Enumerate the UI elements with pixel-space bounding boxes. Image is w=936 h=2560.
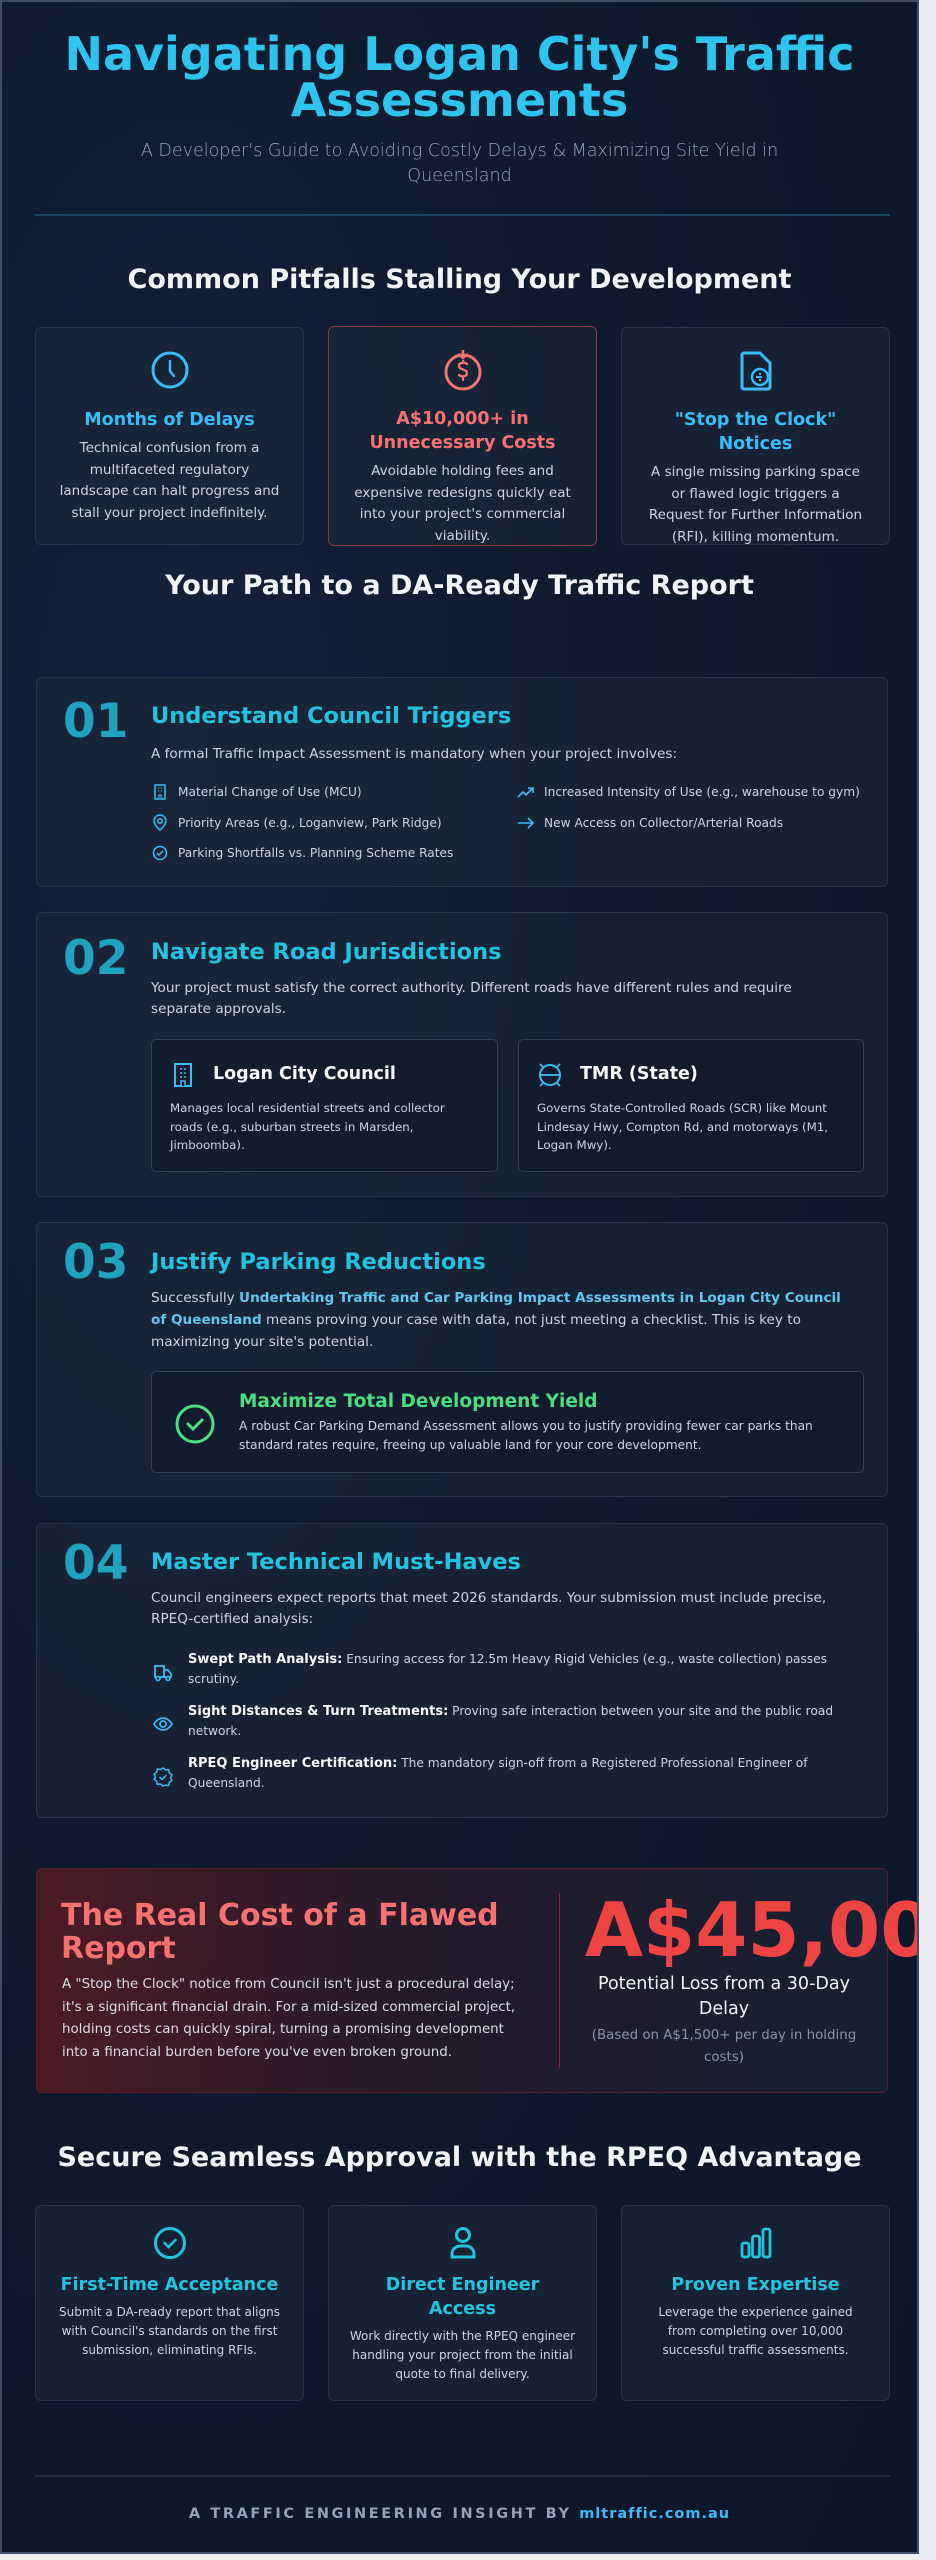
panel: step 01: A formal Traffic Impact Assessment is mandatory when your project involves: — [151, 746, 677, 762]
list: triggers: New Access on Collector/Arterial Roads — [544, 816, 783, 830]
icon: clock — [152, 352, 188, 388]
list: technical items: Sight Distances & Turn Treatments: Proving safe interaction between your site and the public road network. — [188, 1704, 833, 1738]
panel: step 04: Master Technical Must-Haves — [151, 1549, 521, 1575]
panel: step 04 — [36, 1523, 888, 1818]
subtitle: A Developer's Guide to Avoiding Costly Delays & Maximizing Site Yield in Queensland — [141, 141, 778, 186]
panel: first-time acceptance: First-Time Acceptance — [61, 2275, 278, 2295]
panel: real cost: A "Stop the Clock" notice from Council isn't just a procedural delay; it's a significant financial drain. For a mid-sized commercial project, holding costs can quickly spiral, turning a promising development into a financial burden before you've even broken ground. — [62, 1977, 515, 2060]
footer: A TRAFFIC ENGINEERING INSIGHT BY mltraffic.com.au — [189, 2506, 730, 2522]
callout: maximize yield: Maximize Total Development Yield — [239, 1391, 597, 1412]
panel: proven expertise: Leverage the experience gained from completing over 10,000 successful traffic assessments. — [658, 2305, 853, 2357]
panel: engineer access: Access — [429, 2299, 496, 2319]
panel: costs: Avoidable holding fees and expensive redesigns quickly eat into your project's commercial viability. — [354, 463, 571, 544]
panel: proven expertise — [621, 2205, 890, 2401]
panel: months of delays: Months of Delays — [84, 410, 255, 430]
panel: step 04: Council engineers expect reports that meet 2026 standards. Your submission must include precise, RPEQ-certified analysis: — [151, 1590, 826, 1627]
panel: costs: A$10,000+ in — [396, 409, 529, 429]
panel: step 01 — [36, 677, 888, 887]
panel: costs: Unnecessary Costs — [369, 433, 556, 453]
panel: real cost — [36, 1868, 888, 2093]
heading: secure approval: Secure Seamless Approval with the RPEQ Advantage — [57, 2142, 862, 2173]
panel: engineer access — [328, 2205, 597, 2401]
panel: months of delays: Technical confusion from a multifaceted regulatory landscape can halt progress and stall your project indefinitely. — [60, 440, 279, 520]
icon: money bag — [444, 350, 482, 390]
list: triggers: Increased Intensity of Use (e.g., warehouse to gym) — [544, 785, 860, 799]
panel: costs — [328, 326, 597, 546]
heading: common pitfalls: Common Pitfalls Stalling Your Development — [128, 264, 791, 295]
callout: maximize yield: A robust Car Parking Demand Assessment allows you to justify providing fewer car parks than standard rates require, freeing up valuable land for your core development. — [239, 1419, 813, 1452]
panel: step 03: Successfully Undertaking Traffic and Car Parking Impact Assessments in Logan City Council of Queensland means proving your case with data, not just meeting a checklist. This is key to maximizing your site's potential. — [151, 1290, 841, 1350]
title: Navigating Logan City's Traffic — [65, 27, 854, 81]
list: triggers: Parking Shortfalls vs. Planning Scheme Rates — [178, 846, 453, 860]
panel: step 03: 03 — [63, 1235, 128, 1290]
panel: step 02: 02 — [63, 931, 128, 986]
heading: path: Your Path to a DA-Ready Traffic Report — [165, 570, 754, 601]
panel: step 04: 04 — [63, 1536, 128, 1591]
panel: engineer access: Direct Engineer — [386, 2275, 539, 2295]
panel: step 01: 01 — [63, 694, 128, 749]
list: triggers — [152, 784, 860, 860]
panel: proven expertise: Proven Expertise — [671, 2275, 840, 2295]
sub-panel: council: Logan City Council — [213, 1064, 396, 1084]
sub-panel: council: Manages local residential streets and collector roads (e.g., suburban streets in Marsden, Jimboomba). — [170, 1101, 445, 1152]
panel: stop the clock: "Stop the Clock" — [675, 410, 836, 430]
panel: step 02 — [36, 912, 888, 1197]
icon: document — [740, 352, 772, 390]
list: technical items: RPEQ Engineer Certification: The mandatory sign-off from a Registered Professional Engineer of Queensland. — [188, 1756, 808, 1790]
sub-panel: TMR: Governs State-Controlled Roads (SCR) like Mount Lindesay Hwy, Compton Rd, and motorways (M1, Logan Mwy). — [537, 1101, 828, 1152]
panel: real cost: The Real Cost of a Flawed Report — [61, 1898, 499, 1966]
panel: first-time acceptance — [35, 2205, 304, 2401]
panel: step 03: Justify Parking Reductions — [151, 1249, 486, 1275]
list: technical items: Swept Path Analysis: Ensuring access for 12.5m Heavy Rigid Vehicles (e.g., waste collection) passes scrutiny. — [188, 1652, 827, 1686]
sub-panel: TMR — [518, 1039, 864, 1172]
panel: step 02: Navigate Road Jurisdictions — [151, 939, 502, 965]
panel: real cost: Potential Loss from a 30-Day Delay — [598, 1974, 850, 2019]
sub-panel: TMR: TMR (State) — [580, 1064, 698, 1084]
list: triggers: Material Change of Use (MCU) — [178, 785, 362, 799]
panel: months of delays — [35, 327, 304, 545]
callout: maximize yield — [151, 1371, 864, 1473]
panel: step 02: Your project must satisfy the correct authority. Different roads have different rules and require separate approvals. — [151, 980, 792, 1017]
panel: stop the clock: A single missing parking space or flawed logic triggers a Request for Further Information (RFI), killing momentum. — [649, 464, 862, 544]
title: Assessments — [291, 73, 628, 127]
panel: real cost: (Based on A$1,500+ per day in holding costs) — [592, 2028, 856, 2065]
title — [65, 27, 854, 127]
panel: step 03 — [36, 1222, 888, 1497]
sub-panel: council — [151, 1039, 498, 1172]
list: triggers: Priority Areas (e.g., Loganview, Park Ridge) — [178, 816, 442, 830]
panel: step 01: Understand Council Triggers — [151, 703, 511, 729]
panel: engineer access: Work directly with the RPEQ engineer handling your project from the initial quote to final delivery. — [350, 2329, 575, 2381]
panel: first-time acceptance: Submit a DA-ready report that aligns with Council's standards on the first submission, eliminating RFIs. — [59, 2305, 280, 2357]
panel: stop the clock — [621, 327, 890, 545]
list: technical items — [153, 1652, 833, 1790]
panel: stop the clock: Notices — [719, 434, 792, 454]
